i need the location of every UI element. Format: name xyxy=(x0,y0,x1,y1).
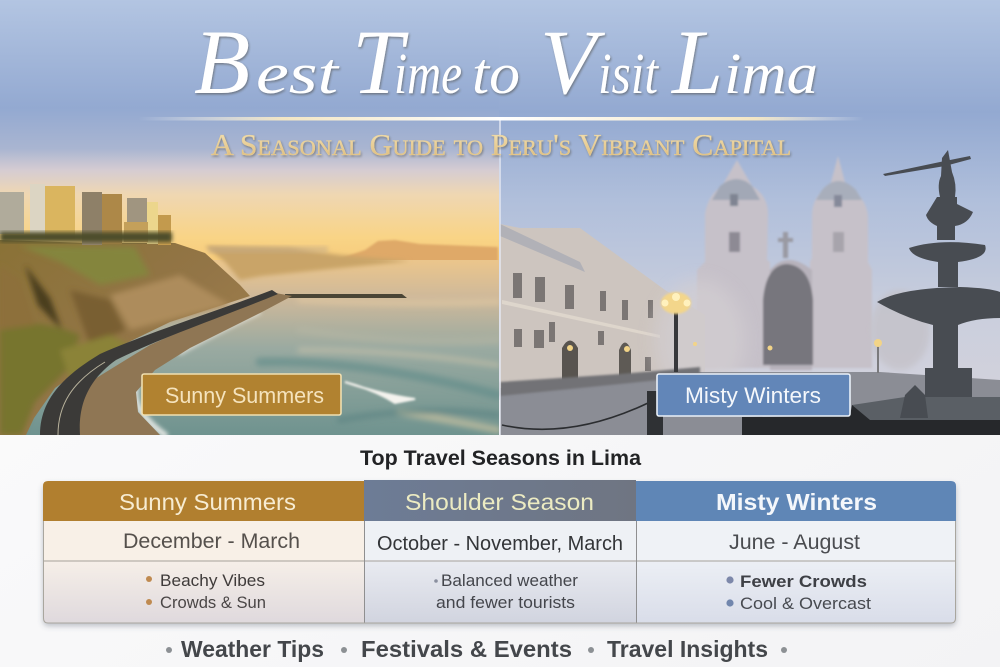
subtitle: A Seasonal Guide to Peru's Vibrant Capital xyxy=(211,127,791,162)
column: sunny summers xyxy=(43,481,364,623)
cliff vegetation and rock xyxy=(0,246,230,435)
street lamp xyxy=(661,292,691,372)
header xyxy=(364,480,636,521)
column: shoulder season: October - November, March xyxy=(377,533,623,555)
details xyxy=(636,561,955,623)
title: ima xyxy=(724,41,818,106)
table grid lines xyxy=(44,521,956,623)
column: sunny summers: Crowds & Sun xyxy=(160,594,266,612)
title: B xyxy=(194,11,250,113)
column: shoulder season: Shoulder Season xyxy=(405,489,594,515)
column: misty winters: June - August xyxy=(729,531,860,554)
column: sunny summers: Beachy Vibes xyxy=(160,572,265,590)
column: misty winters: Cool & Overcast xyxy=(740,594,871,613)
column: shoulder season xyxy=(364,480,636,623)
centre divider xyxy=(499,120,501,435)
months xyxy=(364,521,636,561)
ground xyxy=(500,372,1000,435)
column: misty winters xyxy=(636,481,956,623)
misty sky xyxy=(499,0,1000,400)
months xyxy=(636,521,955,561)
title: L xyxy=(670,11,723,113)
city skyline buildings xyxy=(0,184,172,245)
title: est xyxy=(256,41,340,106)
wave bands xyxy=(260,300,498,430)
title: T xyxy=(352,11,409,113)
title: to xyxy=(472,41,520,106)
label: sunny summers xyxy=(142,374,341,415)
title rule xyxy=(138,117,864,120)
footer topics xyxy=(166,636,787,662)
months xyxy=(44,521,364,561)
title: V xyxy=(540,11,606,113)
column: sunny summers: December - March xyxy=(123,530,300,553)
table body xyxy=(43,481,956,623)
header xyxy=(636,481,956,521)
footer topics: Travel Insights xyxy=(607,636,768,662)
table heading: Top Travel Seasons in Lima xyxy=(360,447,641,470)
chain xyxy=(502,403,648,429)
breaking wave xyxy=(345,382,415,403)
fountain xyxy=(742,150,1000,435)
distant hazy shore xyxy=(205,246,410,280)
small lights xyxy=(567,339,882,373)
column: sunny summers: Sunny Summers xyxy=(119,489,296,515)
title xyxy=(194,11,818,113)
road xyxy=(40,290,278,435)
title: isit xyxy=(598,41,660,106)
sea xyxy=(0,260,499,435)
far city haze xyxy=(208,246,328,253)
far misty trees xyxy=(870,290,930,370)
label: misty winters xyxy=(657,374,850,416)
footer topics: Festivals & Events xyxy=(361,636,572,662)
column: shoulder season: Balanced weather xyxy=(441,572,579,590)
season table xyxy=(43,480,956,623)
photo: misty historic centre xyxy=(499,0,1000,435)
details xyxy=(364,561,636,623)
cliff xyxy=(0,240,250,435)
church facade xyxy=(697,156,872,370)
beach xyxy=(60,292,292,435)
fog overlay xyxy=(648,287,736,372)
label: misty winters: Misty Winters xyxy=(685,383,821,408)
title: ime xyxy=(394,41,462,106)
column: shoulder season: and fewer tourists xyxy=(436,594,575,612)
sunset sky xyxy=(0,0,499,270)
header xyxy=(43,481,364,521)
photo: sunny coastal Lima xyxy=(0,0,499,435)
building windows and doors xyxy=(513,273,653,381)
details xyxy=(44,561,364,623)
footer topics: Weather Tips xyxy=(181,636,324,662)
surf along the shore xyxy=(135,312,258,435)
distant headland xyxy=(348,239,499,260)
pier xyxy=(285,294,407,298)
label: sunny summers: Sunny Summers xyxy=(165,383,324,408)
column: misty winters: Misty Winters xyxy=(716,489,877,515)
column: misty winters: Fewer Crowds xyxy=(740,572,867,591)
colonial building xyxy=(500,224,674,383)
